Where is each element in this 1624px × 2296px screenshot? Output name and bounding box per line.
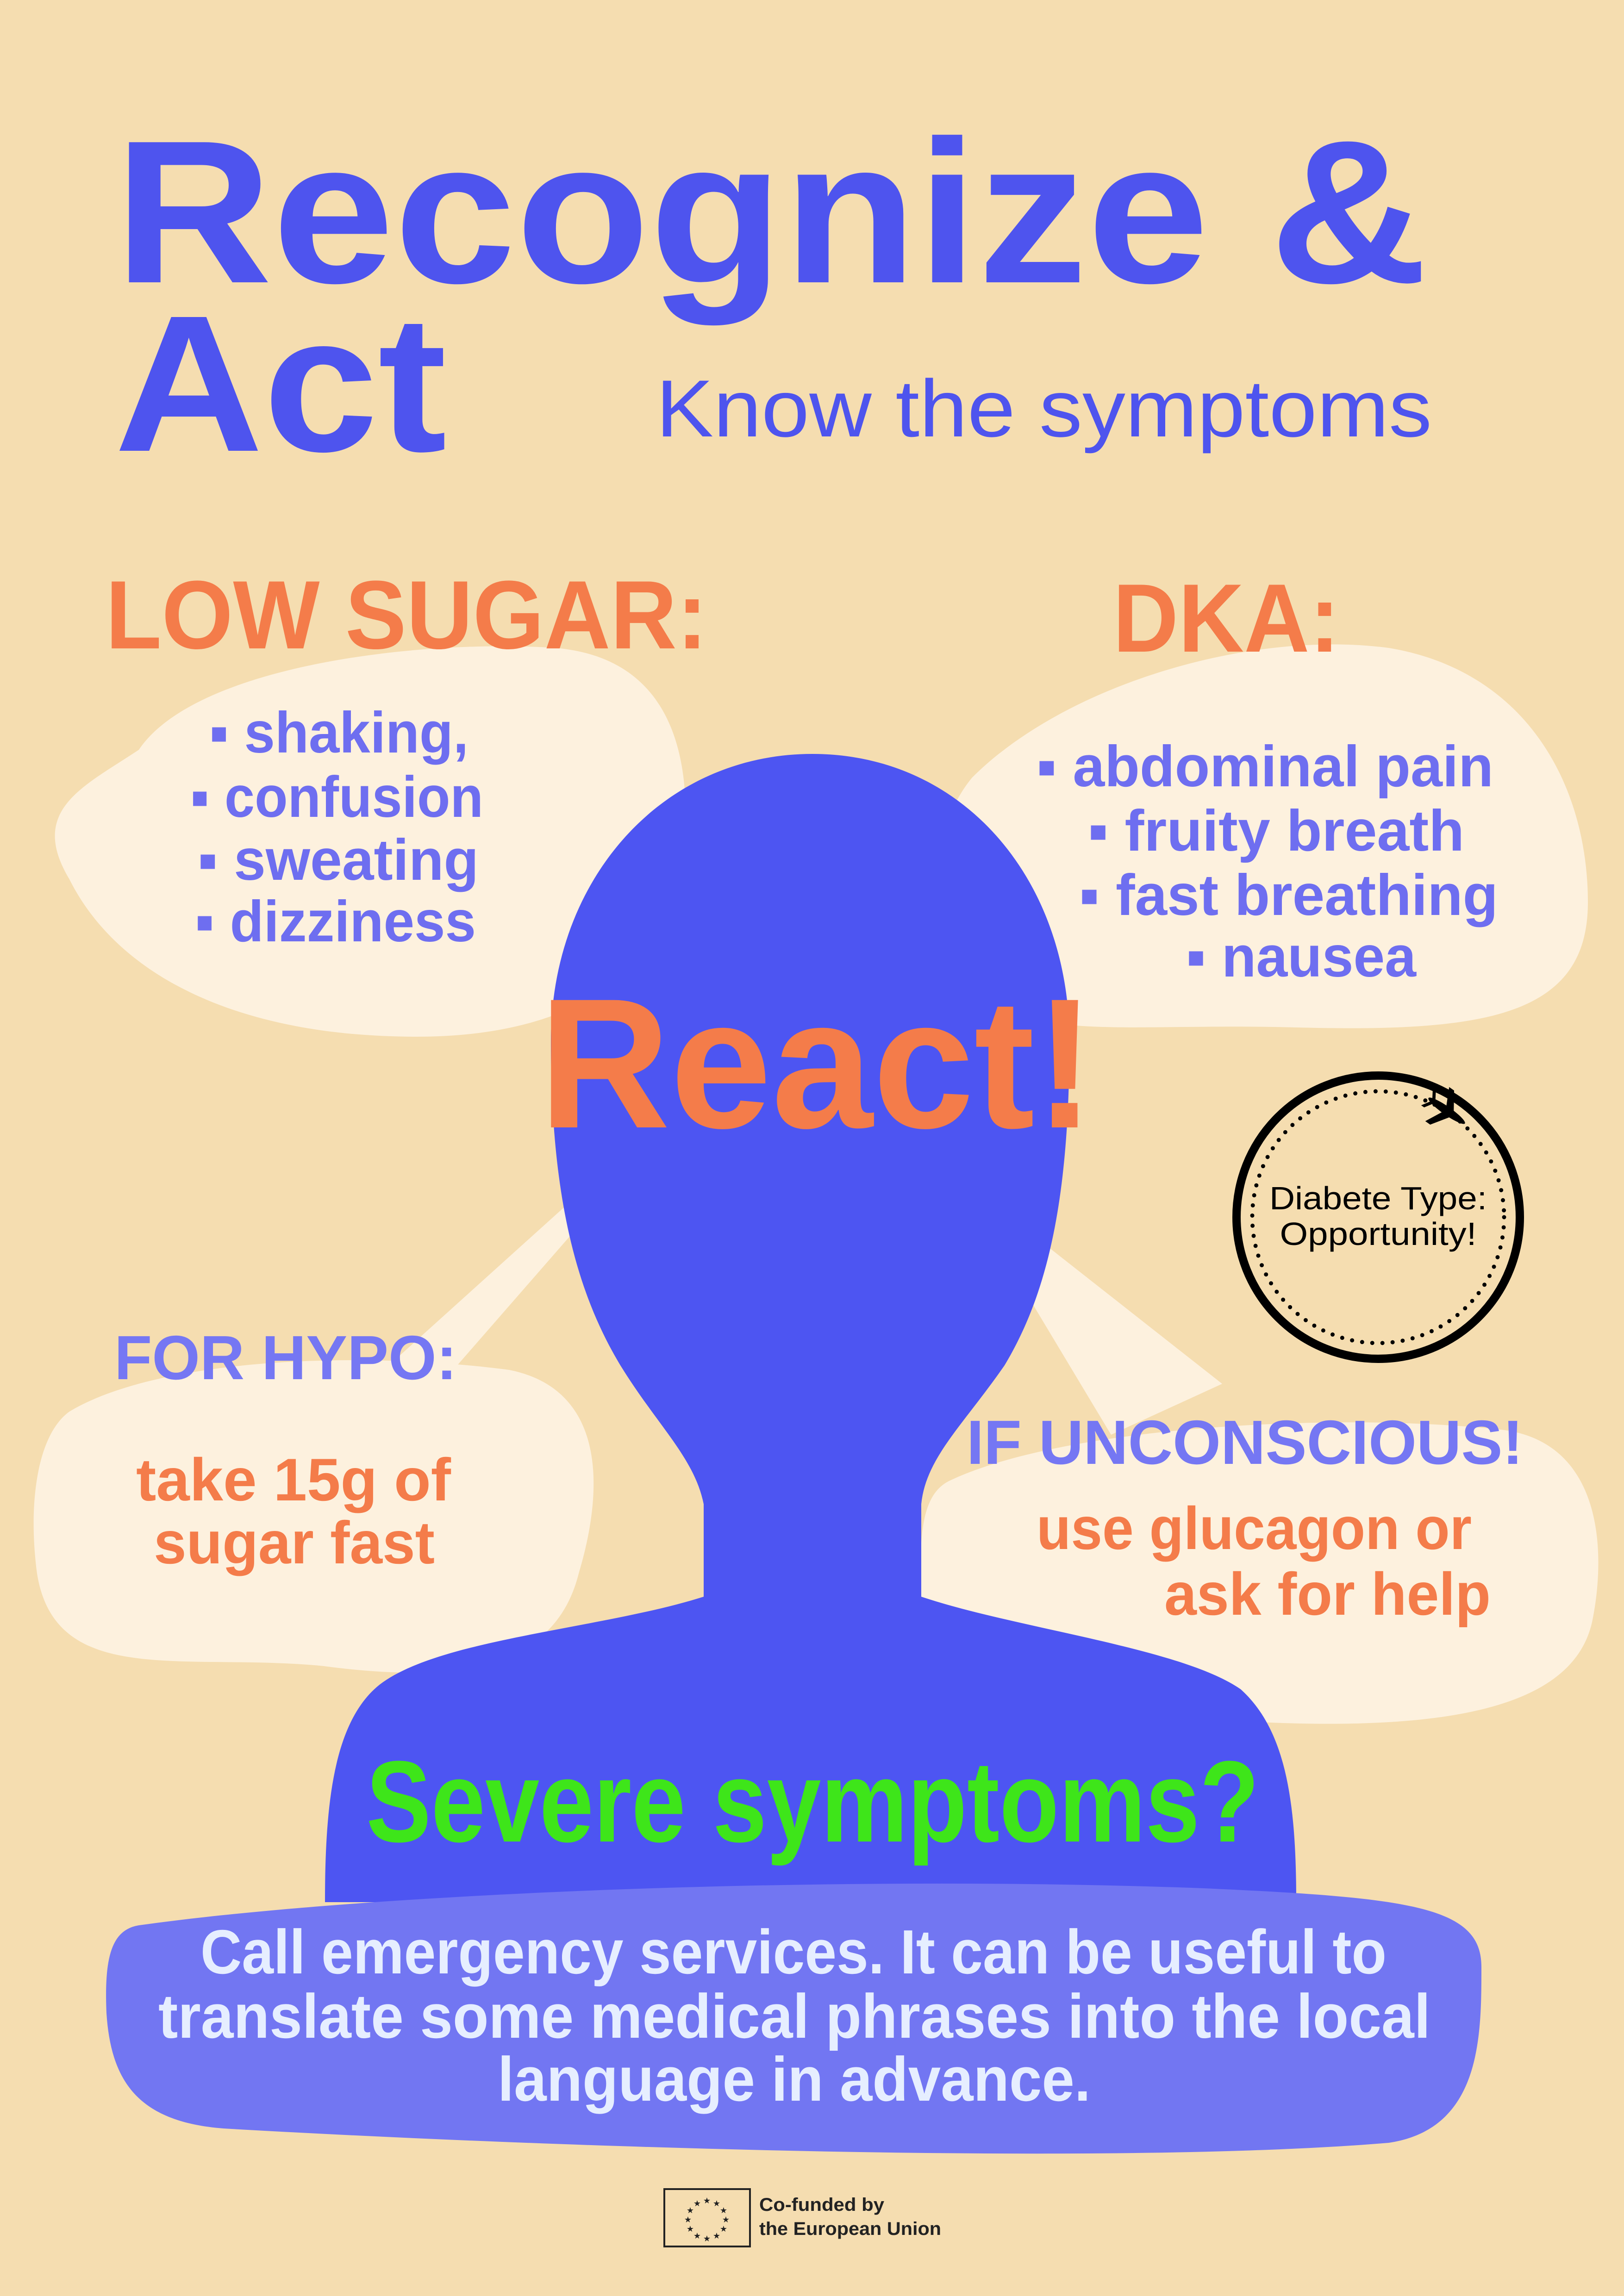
logo: eu co-funded: ★ xyxy=(693,2199,701,2208)
list: dka symptoms: ▪ fast breathing xyxy=(1079,863,1498,927)
subtitle: Know the symptoms xyxy=(656,364,1432,454)
text: unconscious action: use glucagon or xyxy=(1037,1494,1472,1562)
bubble: hypo xyxy=(34,1360,593,1673)
list: low sugar symptoms: ▪ sweating xyxy=(198,828,479,892)
heading: for hypo: FOR HYPO: xyxy=(114,1323,457,1393)
logo: eu co-funded: ★ xyxy=(720,2224,727,2234)
logo: eu co-funded: ★ xyxy=(703,2234,711,2243)
logo: eu co-funded xyxy=(664,2189,941,2246)
react text: React! xyxy=(539,960,1095,1167)
heading: low sugar: LOW SUGAR: xyxy=(106,560,707,669)
badge: Opportunity! xyxy=(1280,1216,1477,1252)
list: dka symptoms: ▪ fruity breath xyxy=(1088,799,1464,863)
logo: eu co-funded: ★ xyxy=(713,2199,720,2208)
panel: emergency callout: Call emergency services. It can be useful to xyxy=(200,1917,1387,1987)
badge: Diabete Type: xyxy=(1269,1180,1487,1216)
list: dka symptoms: ▪ nausea xyxy=(1186,925,1417,989)
logo: eu co-funded: ★ xyxy=(703,2196,711,2205)
logo: eu co-funded: ★ xyxy=(693,2231,701,2240)
heading: if unconscious: IF UNCONSCIOUS! xyxy=(967,1407,1523,1477)
tail: unconscious xyxy=(1025,1240,1222,1435)
heading: severe symptoms: Severe symptoms? xyxy=(366,1737,1259,1866)
silhouette xyxy=(325,754,1296,1902)
logo: eu co-funded: ★ xyxy=(722,2215,730,2224)
logo: eu co-funded: ★ xyxy=(684,2215,692,2224)
list: low sugar symptoms xyxy=(190,701,483,954)
logo: eu co-funded: ★ xyxy=(720,2206,727,2215)
logo: eu co-funded: ★ xyxy=(687,2224,694,2234)
tail: hypo xyxy=(384,1203,576,1370)
text: hypo action: take 15g of xyxy=(136,1446,451,1513)
logo: eu co-funded: Co-funded by xyxy=(759,2195,885,2215)
list: low sugar symptoms: ▪ confusion xyxy=(190,765,483,829)
list: dka symptoms xyxy=(1037,734,1498,989)
heading: dka: DKA: xyxy=(1113,564,1340,672)
text: unconscious action: ask for help xyxy=(1164,1560,1491,1628)
text: hypo action xyxy=(136,1446,451,1576)
title: Act xyxy=(114,275,447,492)
bubble: unconscious xyxy=(921,1422,1598,1724)
logo: eu co-funded: the European Union xyxy=(759,2219,941,2239)
panel: emergency callout xyxy=(106,1884,1481,2153)
title xyxy=(114,99,1428,492)
list: low sugar symptoms: ▪ shaking, xyxy=(209,701,468,765)
badge xyxy=(1237,1076,1520,1359)
bubble: dka xyxy=(934,644,1588,1028)
logo: eu co-funded: ★ xyxy=(687,2206,694,2215)
panel: emergency callout: language in advance. xyxy=(498,2044,1091,2114)
list: dka symptoms: ▪ abdominal pain xyxy=(1037,734,1493,799)
text: hypo action: sugar fast xyxy=(154,1509,435,1576)
logo: eu co-funded: ★ xyxy=(713,2231,720,2240)
title: Recognize & xyxy=(114,99,1428,327)
text: unconscious action xyxy=(1037,1494,1491,1628)
bubble: low sugar xyxy=(55,646,686,1037)
panel: emergency callout: translate some medical phrases into the local xyxy=(158,1981,1430,2051)
list: low sugar symptoms: ▪ dizziness xyxy=(195,890,476,954)
icon: plane xyxy=(1415,1080,1477,1140)
